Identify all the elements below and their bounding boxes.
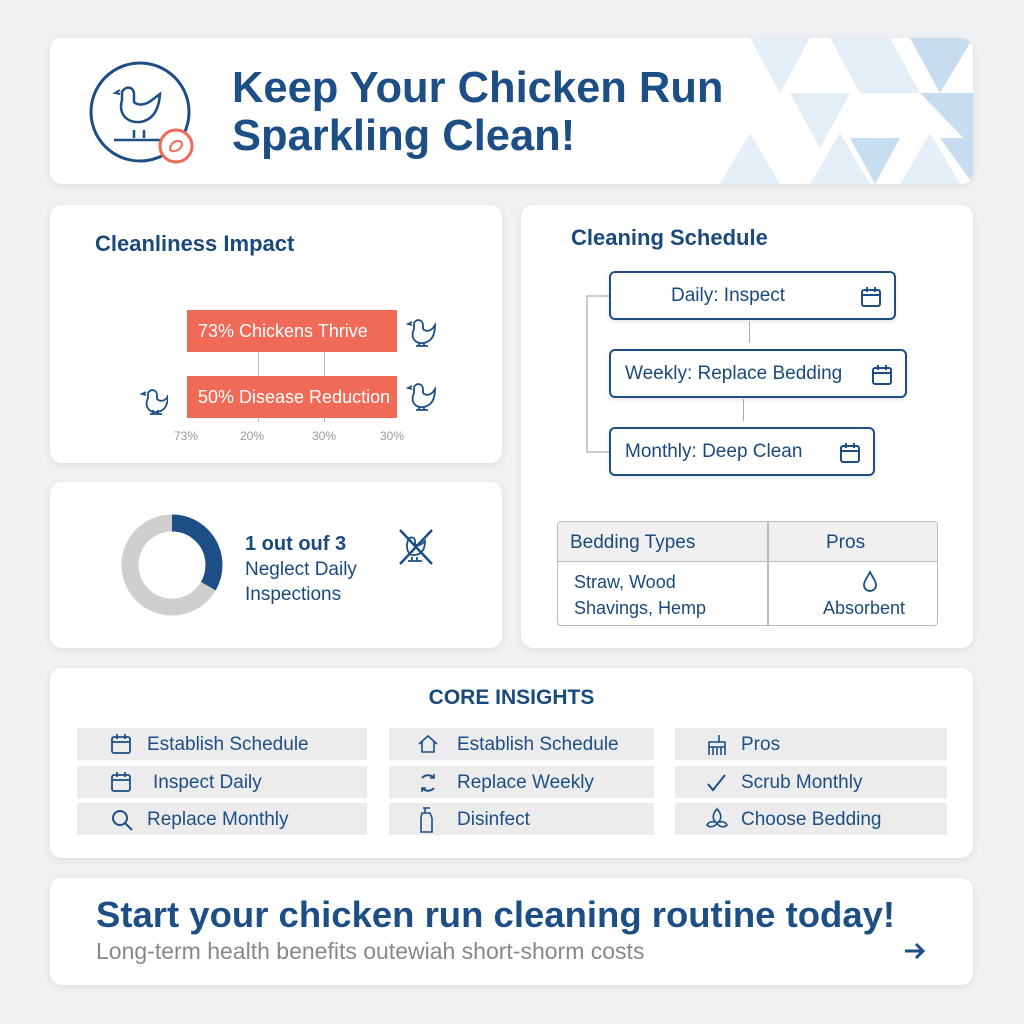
stat text: 1 out ouf 3 bbox=[245, 533, 346, 555]
step: daily bbox=[609, 271, 896, 320]
bar chart: 73% bbox=[174, 429, 198, 443]
panel: core insights: Replace Weekly bbox=[457, 772, 594, 793]
stat text: Inspections bbox=[245, 584, 341, 605]
step: weekly bbox=[609, 349, 907, 398]
icon: chicken badge bbox=[90, 62, 194, 164]
step: weekly: Weekly: Replace Bedding bbox=[625, 363, 842, 384]
panel: core insights: Inspect Daily bbox=[153, 772, 262, 793]
panel: cleaning schedule bbox=[521, 205, 973, 648]
panel: core insights: Disinfect bbox=[457, 809, 530, 830]
panel: cleanliness impact bbox=[50, 205, 502, 463]
title: Sparkling Clean! bbox=[232, 112, 575, 160]
step: daily: Daily: Inspect bbox=[671, 285, 785, 306]
donut chart bbox=[122, 514, 222, 616]
panel: core insights: Replace Monthly bbox=[147, 809, 289, 830]
title bbox=[232, 64, 723, 160]
table: bedding types: Pros bbox=[826, 532, 865, 553]
footer call to action bbox=[50, 878, 973, 985]
table: bedding types: Absorbent bbox=[823, 598, 905, 618]
panel: core insights: Choose Bedding bbox=[741, 809, 882, 830]
icon: crossed chicken bbox=[399, 529, 433, 565]
footer call to action: Long-term health benefits outewiah short-shorm costs bbox=[96, 938, 644, 964]
panel: core insights: Scrub Monthly bbox=[741, 772, 862, 793]
panel: neglect stat bbox=[50, 482, 502, 648]
heading: Cleaning Schedule bbox=[571, 225, 768, 250]
header card bbox=[50, 38, 973, 184]
stat text: Neglect Daily bbox=[245, 559, 357, 580]
title: Keep Your Chicken Run bbox=[232, 64, 723, 112]
panel: core insights: Establish Schedule bbox=[147, 734, 309, 755]
bar chart: 20% bbox=[240, 429, 264, 443]
bar chart: 30% bbox=[380, 429, 404, 443]
bar chart: 50% Disease Reduction bbox=[198, 387, 390, 407]
bar chart: 73% Chickens Thrive bbox=[198, 321, 368, 341]
step: monthly: Monthly: Deep Clean bbox=[625, 441, 802, 462]
triangle pattern bbox=[720, 38, 973, 184]
table: bedding types: Shavings, Hemp bbox=[574, 598, 706, 618]
table: bedding types bbox=[557, 521, 938, 626]
stat text bbox=[245, 533, 357, 605]
bar chart: 30% bbox=[312, 429, 336, 443]
footer call to action: Start your chicken run cleaning routine today! bbox=[96, 894, 895, 935]
panel: core insights bbox=[50, 668, 973, 858]
table: bedding types: Bedding Types bbox=[570, 532, 695, 553]
bar chart bbox=[140, 310, 436, 443]
arrow bbox=[905, 943, 925, 959]
panel: core insights: Establish Schedule bbox=[457, 734, 619, 755]
panel: core insights: Pros bbox=[741, 734, 780, 755]
table: bedding types: Straw, Wood bbox=[574, 572, 676, 592]
step: monthly bbox=[609, 427, 875, 476]
flow connector bbox=[586, 295, 610, 453]
heading: Cleanliness Impact bbox=[95, 231, 294, 256]
heading: CORE INSIGHTS bbox=[429, 686, 594, 709]
